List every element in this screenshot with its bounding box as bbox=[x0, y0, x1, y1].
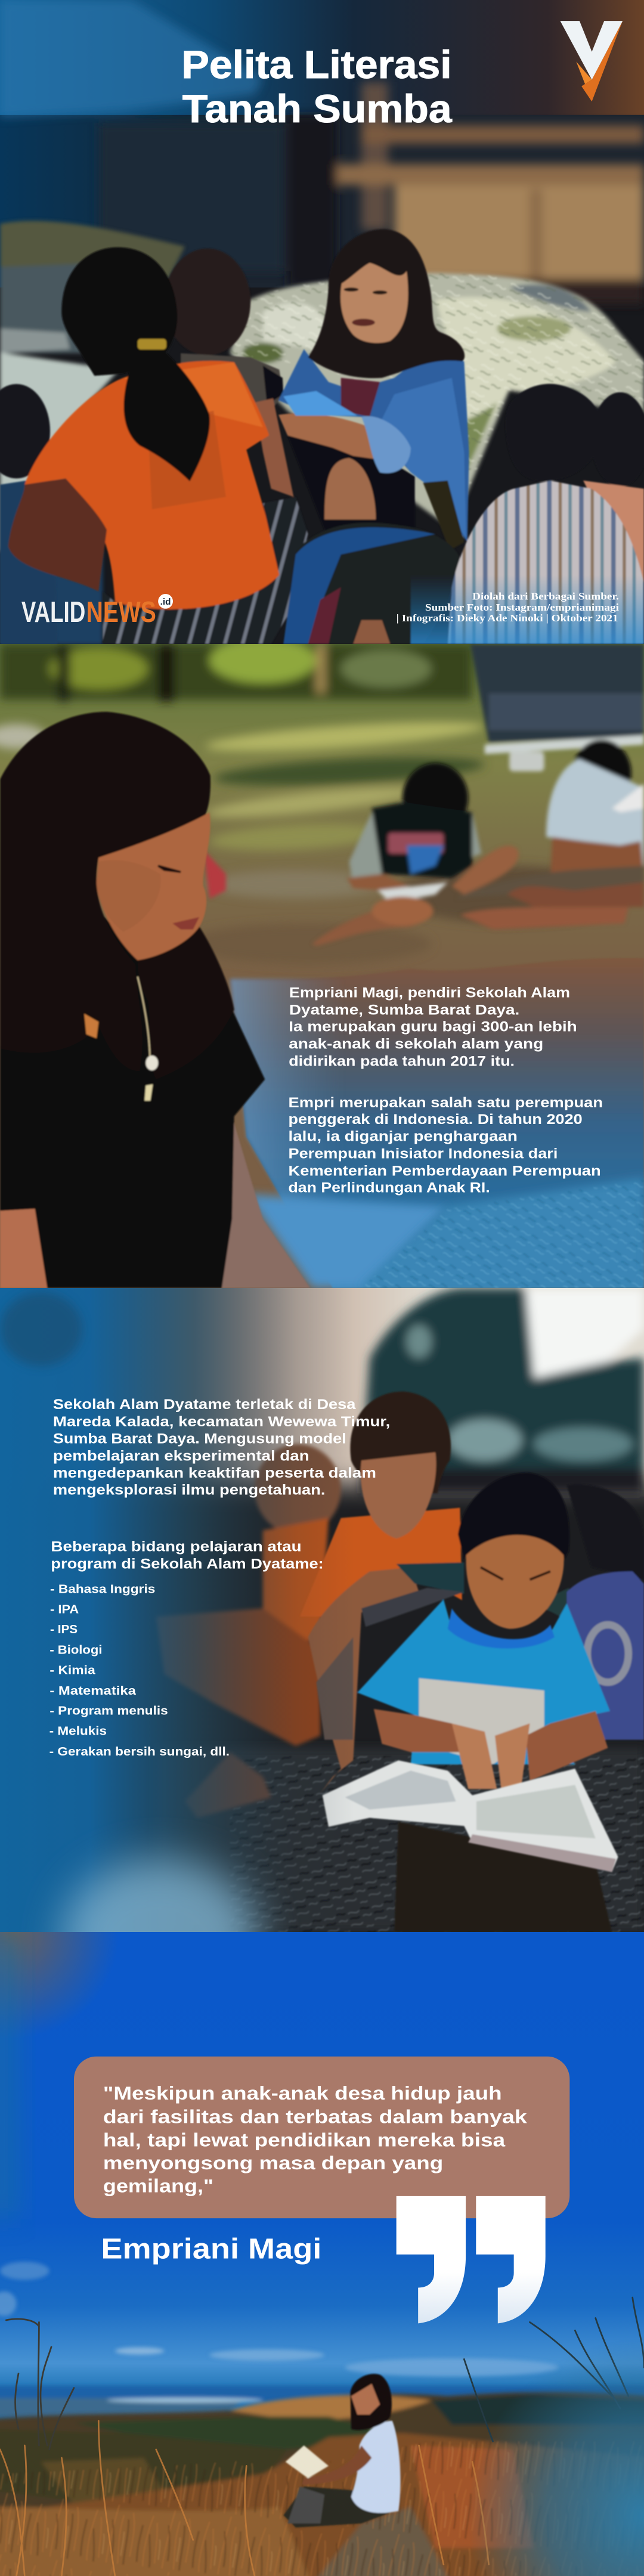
programs list: - Kimia bbox=[49, 1663, 95, 1677]
photo: children reading bbox=[0, 1247, 644, 2015]
quote box: hal, tapi lewat pendidikan mereka bisa bbox=[103, 2129, 506, 2151]
photo: sky and savanna hills bbox=[0, 1825, 644, 2576]
woman hair bbox=[308, 229, 465, 378]
programs list: - IPA bbox=[50, 1603, 79, 1617]
grass blades bbox=[0, 2298, 644, 2576]
logo: Validnews bbox=[21, 594, 173, 628]
legs bbox=[394, 1822, 612, 1932]
school description text: Sekolah Alam Dyatame terletak di Desa bbox=[53, 1397, 356, 1413]
profile text: Kementerian Pemberdayaan Perempuan bbox=[289, 1163, 601, 1179]
programs list: - IPS bbox=[50, 1623, 78, 1636]
school description text: mengedepankan keaktifan peserta dalam bbox=[53, 1465, 376, 1481]
woman portrait bbox=[0, 712, 310, 1288]
programs heading: program di Sekolah Alam Dyatame: bbox=[51, 1556, 324, 1572]
front child bbox=[357, 1599, 610, 1764]
middle child bbox=[300, 1507, 462, 1617]
quote box bbox=[74, 2057, 569, 2218]
woman reading on the hill bbox=[283, 2374, 401, 2528]
school description text: pembelajaran eksperimental dan bbox=[53, 1448, 309, 1464]
crouching child bbox=[283, 522, 460, 644]
profile text: Empriani Magi, pendiri Sekolah Alam bbox=[289, 984, 570, 1001]
logo: Validnews: .id bbox=[160, 597, 171, 607]
profile text bbox=[289, 984, 603, 1196]
quote author: Empriani Magi bbox=[101, 2233, 321, 2265]
profile text: penggerak di Indonesia. Di tahun 2020 bbox=[289, 1111, 583, 1128]
back child bbox=[255, 1444, 341, 1534]
title: Pelita Literasi bbox=[181, 43, 452, 87]
right boys bbox=[592, 392, 644, 487]
source credits: Sumber Foto: Instagram/emprianimagi bbox=[425, 602, 619, 613]
girl hair and ponytail bbox=[61, 247, 178, 376]
panel: Sekolah Alam Dyatame bbox=[0, 1247, 644, 2015]
icon: V logo bbox=[560, 21, 623, 101]
programs list: - Program menulis bbox=[49, 1704, 168, 1718]
programs list: - Matematika bbox=[49, 1684, 137, 1698]
left dark child bbox=[0, 384, 50, 478]
grass texture bbox=[0, 2441, 644, 2576]
programs list: - Gerakan bersih sungai, dll. bbox=[49, 1745, 230, 1758]
profile text: didirikan pada tahun 2017 itu. bbox=[289, 1053, 515, 1069]
source credits: Diolah dari Berbagai Sumber. bbox=[472, 591, 619, 602]
programs list: - Biologi bbox=[49, 1643, 103, 1657]
title bbox=[181, 43, 453, 131]
profile text: Empri merupakan salah satu perempuan bbox=[289, 1095, 603, 1111]
right boy bbox=[567, 1484, 644, 1580]
logo: Validnews: NEWS bbox=[86, 595, 156, 628]
title: Tanah Sumba bbox=[182, 87, 453, 131]
source credits: | Infografis: Dieky Ade Ninoki | Oktober 2021 bbox=[397, 612, 618, 624]
school description text bbox=[53, 1397, 390, 1498]
logo: Validnews: VALID bbox=[21, 595, 85, 628]
woman jacket bbox=[278, 349, 469, 542]
source credits bbox=[397, 591, 619, 624]
school description text: Sumba Barat Daya. Mengusung model bbox=[53, 1431, 346, 1447]
profile text: lalu, ia diganjar penghargaan bbox=[289, 1128, 518, 1144]
panel: cover photo with title bbox=[0, 0, 644, 645]
striped shorts bbox=[103, 497, 308, 644]
back child bbox=[165, 249, 250, 355]
quote box: "Meskipun anak-anak desa hidup jauh bbox=[103, 2082, 502, 2104]
programs heading: Beberapa bidang pelajaran atau bbox=[51, 1539, 302, 1555]
programs heading bbox=[51, 1539, 324, 1572]
open book bbox=[323, 1760, 618, 1872]
profile text: Dyatame, Sumba Barat Daya. bbox=[289, 1002, 519, 1018]
programs list: - Melukis bbox=[49, 1724, 107, 1738]
panel: quote bbox=[0, 1825, 644, 2576]
panel: Empriani Magi profile bbox=[0, 638, 644, 1288]
photo: woman teaching children outdoors bbox=[0, 0, 644, 645]
profile text: Perempuan Inisiator Indonesia dari bbox=[289, 1145, 558, 1162]
profile text: Ia merupakan guru bagi 300-an lebih bbox=[289, 1019, 577, 1035]
quote box: dari fasilitas dan terbatas dalam banyak bbox=[103, 2106, 527, 2127]
programs list bbox=[49, 1583, 230, 1758]
profile text: dan Perlindungan Anak RI. bbox=[289, 1180, 490, 1196]
icon: closing quotation marks bbox=[397, 2196, 546, 2323]
blue fade overlay bbox=[0, 1288, 644, 2015]
profile text: anak-anak di sekolah alam yang bbox=[289, 1036, 543, 1052]
rock ground bbox=[156, 1748, 644, 1932]
photo: children studying on the grass and woman portrait bbox=[0, 638, 644, 1288]
quote box: menyongsong masa depan yang bbox=[103, 2152, 443, 2174]
school description text: Mareda Kalada, kecamatan Wewewa Timur, bbox=[53, 1414, 390, 1430]
orange shirt bbox=[24, 361, 279, 609]
blue gradient wave panel bbox=[230, 958, 644, 1288]
programs list: - Bahasa Inggris bbox=[50, 1583, 155, 1596]
school description text: mengeksplorasi ilmu pengetahuan. bbox=[53, 1482, 326, 1498]
quote box: gemilang," bbox=[103, 2175, 213, 2197]
